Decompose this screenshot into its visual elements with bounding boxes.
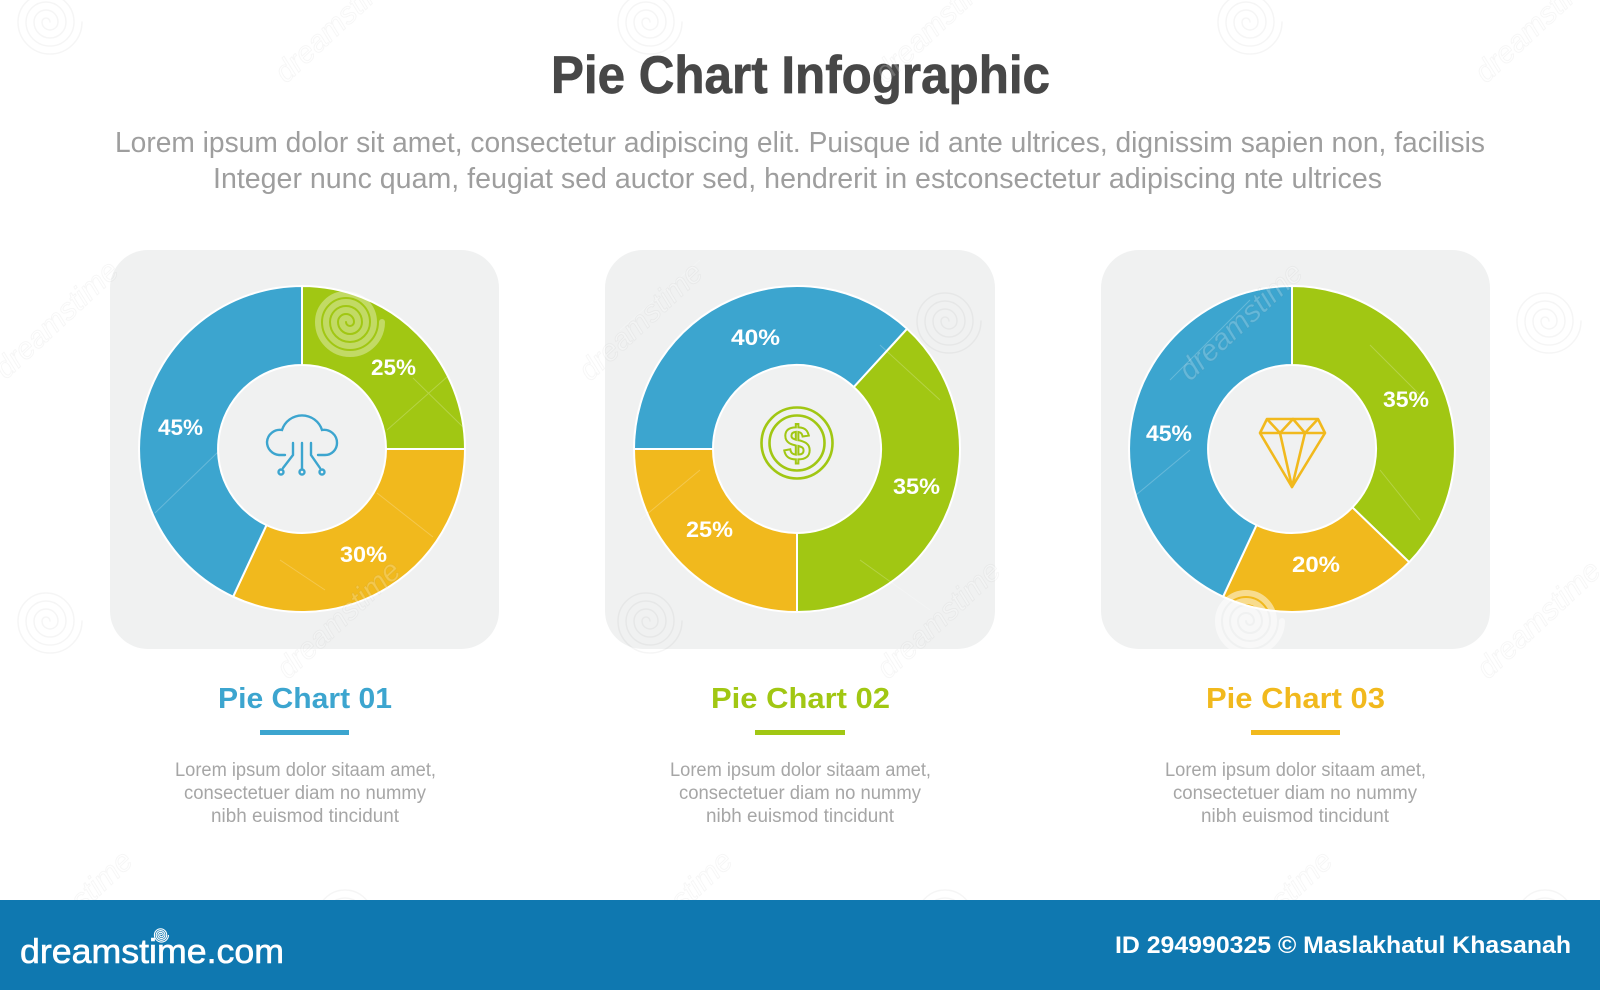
description: Lorem ipsum dolor sitaam amet, (175, 760, 436, 781)
caption: pie chart 02 (670, 683, 931, 827)
description (1165, 760, 1426, 827)
footer bar (0, 900, 1600, 990)
subtitle text: Integer nunc quam, feugiat sed auctor sed, hendrerit in estconsectetur adipiscing nte ultrices (213, 163, 1382, 195)
heading: Pie Chart 02 (711, 683, 890, 715)
icon: cloud network (267, 415, 337, 474)
logo swirl (154, 929, 168, 942)
watermark text: dreamstime (2, 844, 139, 975)
percentage labels: 35% (1383, 387, 1429, 412)
panel: pie chart 02 (605, 250, 995, 649)
description: nibh euismod tincidunt (1201, 806, 1390, 827)
description: consectetuer diam no nummy (184, 783, 426, 804)
icon: dollar coin (762, 408, 832, 478)
description (175, 760, 436, 827)
percentage labels: 25% (686, 517, 733, 542)
description: Lorem ipsum dolor sitaam amet, (670, 760, 931, 781)
icon: diamond (1260, 419, 1325, 487)
description: nibh euismod tincidunt (706, 806, 895, 827)
donut chart 02 (634, 286, 960, 612)
description: consectetuer diam no nummy (1173, 783, 1417, 804)
card background (605, 250, 995, 649)
heading: Pie Chart 03 (1206, 683, 1385, 715)
percentage labels: 25% (371, 355, 416, 380)
caption: pie chart 01 (175, 683, 436, 827)
percentage labels (158, 355, 416, 567)
subtitle text: Lorem ipsum dolor sit amet, consectetur adipiscing elit. Puisque id ante ultrices, dignissim sapien non, facilisis (115, 127, 1485, 159)
donut chart 01 (139, 286, 465, 612)
panel: pie chart 03 (1101, 250, 1490, 649)
watermark text: dreamstime (1202, 844, 1339, 975)
percentage labels: 30% (340, 542, 387, 567)
icon: dollar coin: $ (784, 418, 811, 471)
caption: pie chart 03 (1165, 683, 1426, 827)
percentage labels: 45% (158, 415, 203, 440)
watermark text: dreamstime (572, 256, 709, 387)
underline (1251, 730, 1340, 735)
watermark text: dreamstime (602, 844, 739, 975)
underline (260, 730, 349, 735)
heading: Pie Chart 01 (218, 683, 392, 715)
watermark text: dreamstime (1172, 256, 1309, 387)
percentage labels: 45% (1146, 421, 1192, 446)
percentage labels (1146, 387, 1429, 577)
card background (1101, 250, 1490, 649)
title: Pie Chart Infographic (551, 46, 1050, 105)
card background (110, 250, 499, 649)
donut chart 03 (1129, 286, 1455, 612)
percentage labels: 20% (1292, 552, 1340, 577)
footer credit: ID 294990325 © Maslakhatul Khasanah (1115, 932, 1571, 959)
watermark text: dreamstime (270, 554, 407, 685)
watermark text: dreamstime (870, 554, 1007, 685)
percentage labels: 35% (893, 474, 940, 499)
description: nibh euismod tincidunt (211, 806, 400, 827)
description (670, 760, 931, 827)
panel: pie chart 01 (110, 250, 499, 649)
description: consectetuer diam no nummy (679, 783, 921, 804)
percentage labels: 40% (731, 325, 780, 350)
underline (755, 730, 845, 735)
description: Lorem ipsum dolor sitaam amet, (1165, 760, 1426, 781)
subtitle text (115, 127, 1485, 195)
footer logo: dreamstime.com (20, 933, 284, 971)
percentage labels (686, 325, 940, 542)
